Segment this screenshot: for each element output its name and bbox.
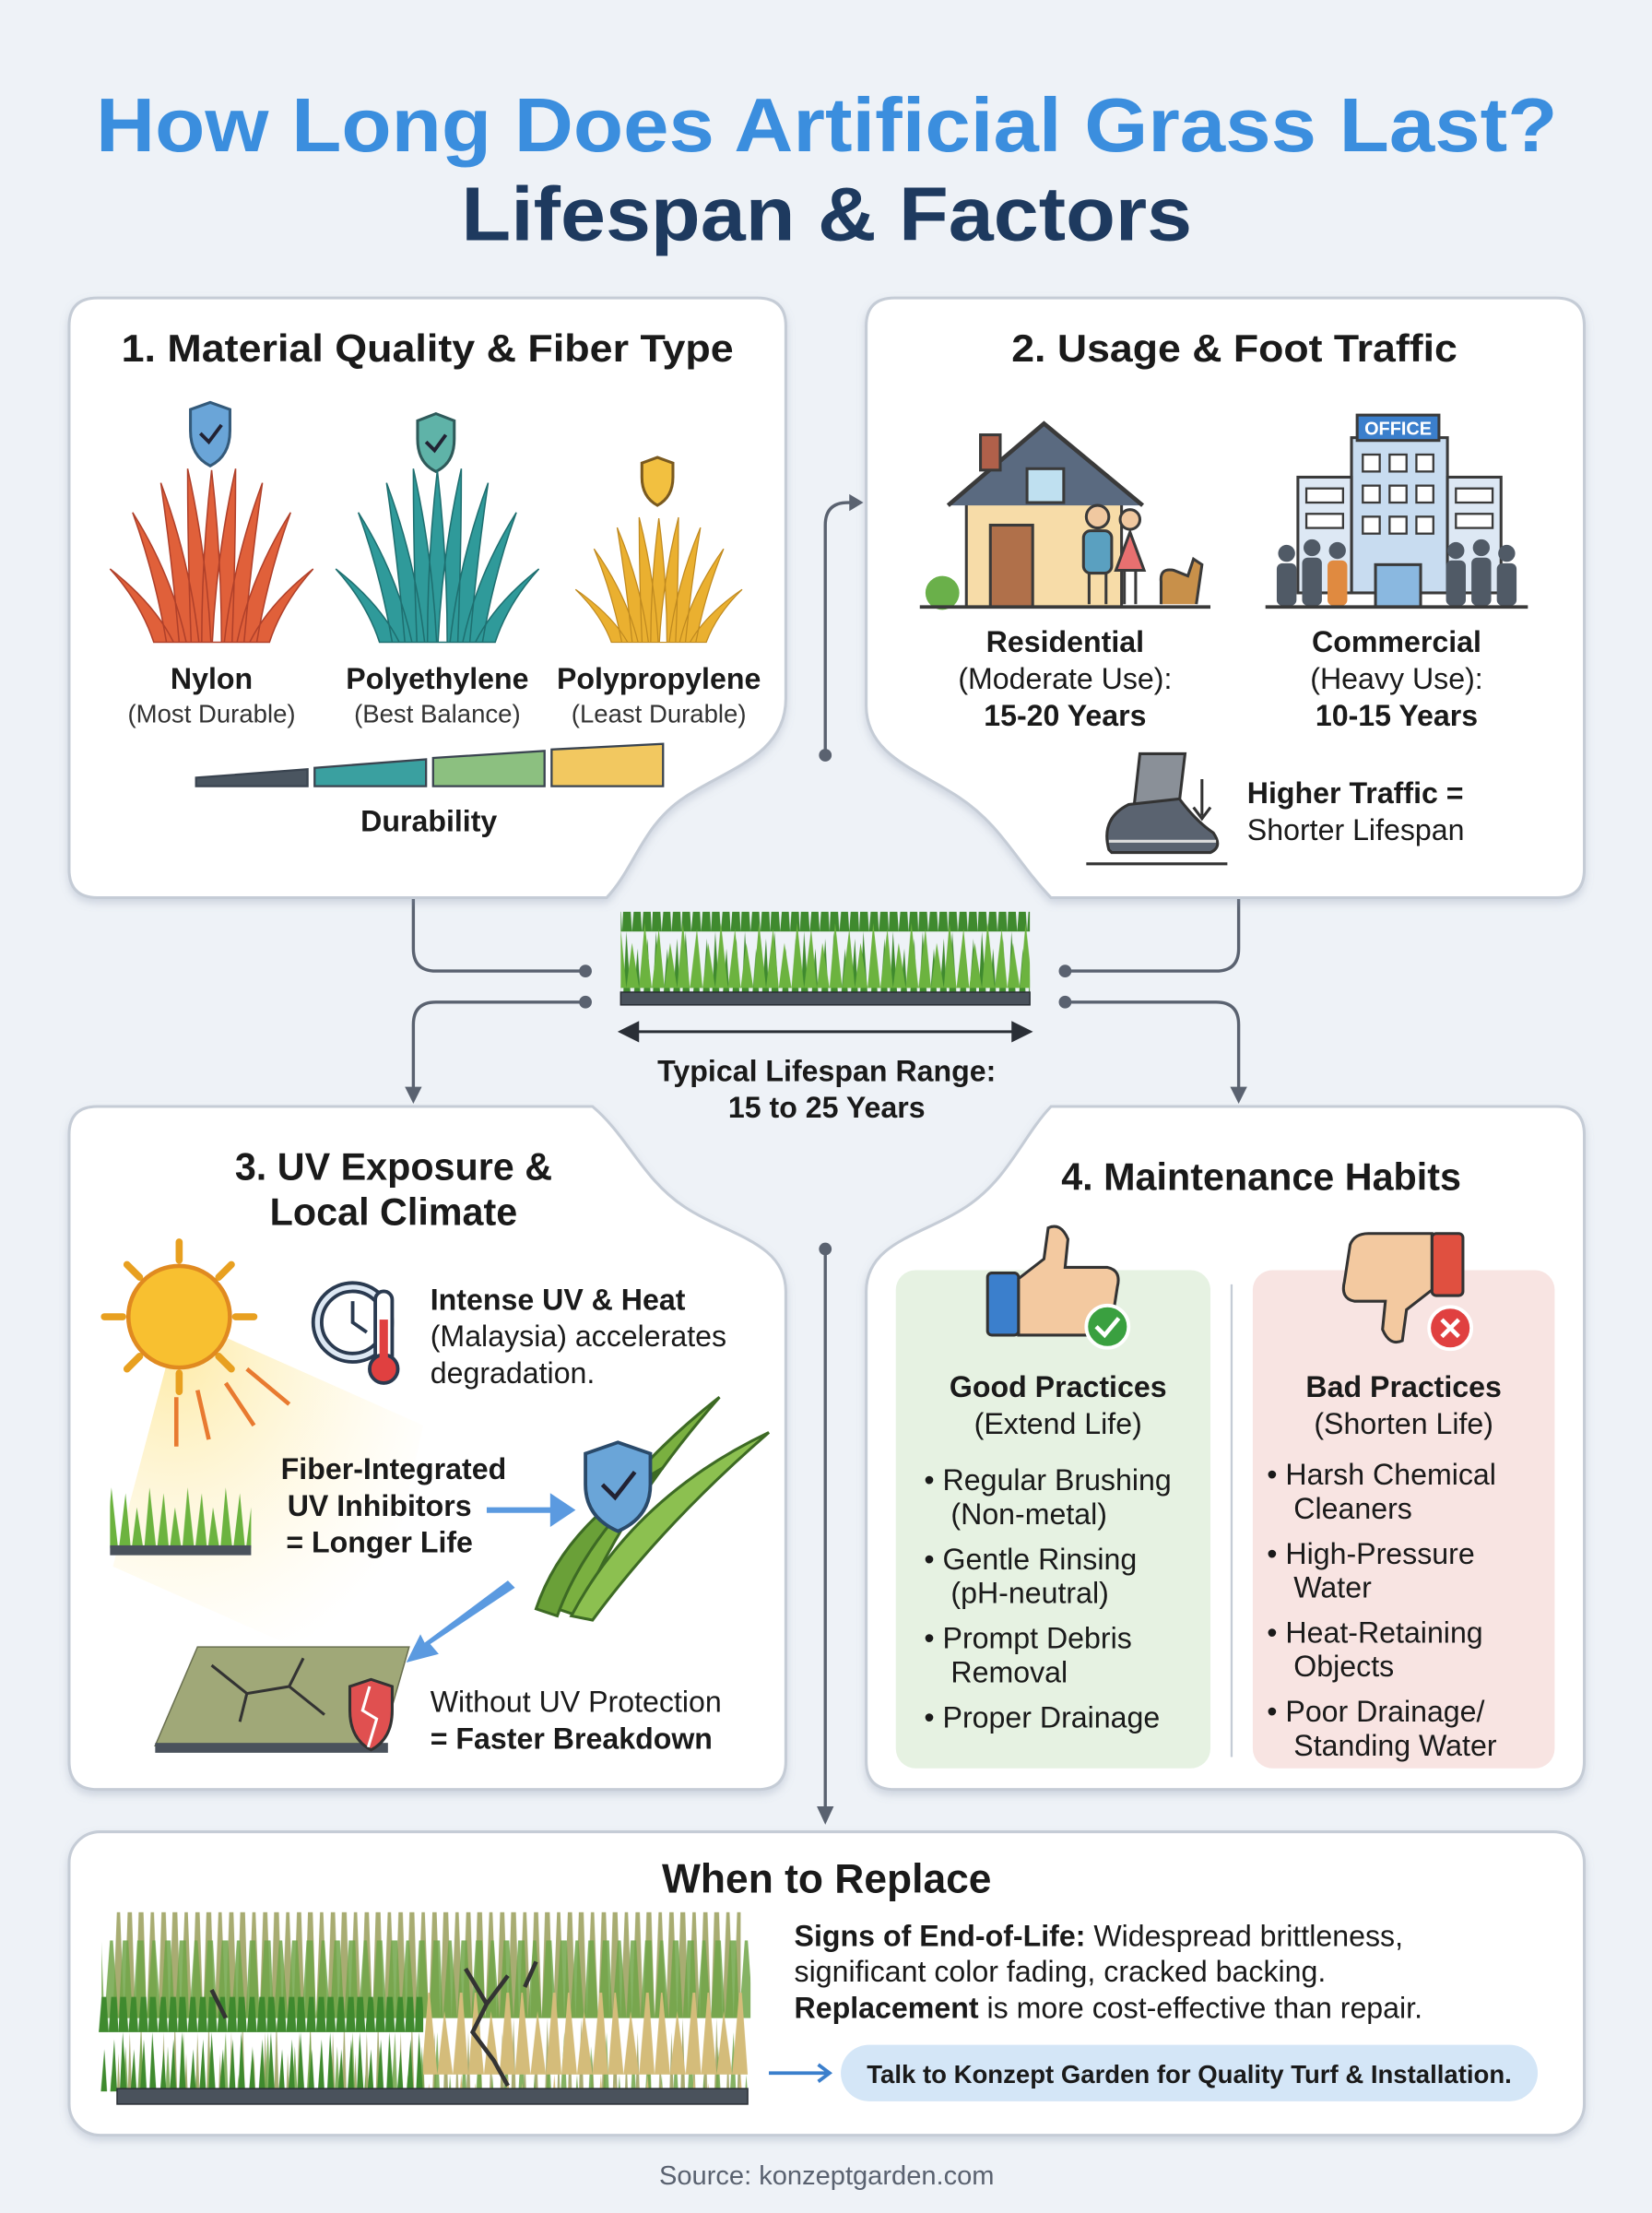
callout: CTA pill: Talk to Konzept Garden for Quality Turf & Installation.: [867, 2060, 1512, 2089]
text: intense UV: (Malaysia) accelerates: [431, 1320, 726, 1353]
text: without UV: [431, 1686, 722, 1755]
heading: [235, 1146, 552, 1234]
labels: Polypropylene: [557, 662, 761, 695]
icon: office with crowd: OFFICE: [1364, 420, 1432, 440]
heading: 1. Material Quality & Fiber Type: [122, 327, 734, 370]
heading: 2. Usage & Foot Traffic: [1011, 327, 1457, 370]
panel: when to replace: [69, 1832, 1585, 2136]
icon: nylon grass: [110, 402, 313, 643]
bad practices box: • Heat-Retaining: [1267, 1616, 1483, 1650]
text: signs: Signs of End-of-Life: Widespread brittleness,: [795, 1920, 1403, 1953]
icon: polyethylene grass: [336, 414, 539, 643]
text: UV inhibitors: Fiber-Integrated: [281, 1452, 506, 1485]
labels: (Best Balance): [354, 700, 521, 728]
icon: thumbs down: [1343, 1234, 1471, 1349]
labels: 10-15 Years: [1316, 699, 1478, 732]
heading: 3. UV Exposure &: [235, 1146, 552, 1189]
bad practices box: (Shorten Life): [1314, 1407, 1493, 1440]
text: signs: [795, 1920, 1422, 2025]
callout: traffic: [1247, 776, 1465, 846]
icon: polypropylene grass: [575, 457, 742, 643]
labels: Commercial: [1312, 625, 1481, 658]
labels: (Most Durable): [128, 700, 296, 728]
labels: (Least Durable): [572, 700, 747, 728]
bad practices box: • High-Pressure: [1267, 1537, 1475, 1570]
durability bar: [196, 744, 663, 838]
panel 3: UV exposure: [69, 1106, 785, 1790]
text: UV inhibitors: [281, 1452, 506, 1559]
heading: Local Climate: [270, 1191, 517, 1234]
icon: cracked turf: [155, 1647, 409, 1753]
bad practices box: Objects: [1293, 1650, 1394, 1683]
bad practices box: • Harsh Chemical: [1267, 1458, 1496, 1491]
good practices box: • Gentle Rinsing: [924, 1543, 1137, 1576]
good practices box: (Non-metal): [950, 1497, 1107, 1531]
title: Lifespan & Factors: [461, 171, 1192, 256]
text: without UV: = Faster Breakdown: [431, 1722, 713, 1755]
icon: house with family: [920, 423, 1210, 609]
text: intense UV: [431, 1283, 726, 1390]
source: Source: konzeptgarden.com: [659, 2161, 995, 2191]
text: signs: Replacement is more cost-effective than repair.: [795, 1992, 1422, 2025]
bad practices box: • Poor Drainage/: [1267, 1695, 1485, 1728]
labels: [128, 662, 761, 728]
callout: traffic: Shorter Lifespan: [1247, 813, 1465, 846]
bad practices box: Bad Practices: [1305, 1370, 1502, 1403]
icon: clock thermometer: [313, 1283, 398, 1383]
icon: small grass: [110, 1485, 251, 1556]
panel 4: maintenance: [867, 1106, 1585, 1790]
text: intense UV: Intense UV & Heat: [431, 1283, 686, 1316]
good practices box: (Extend Life): [974, 1407, 1142, 1440]
icon: worn grass: [99, 1912, 750, 2104]
text: intense UV: degradation.: [431, 1356, 595, 1390]
arrow: to blade: [487, 1493, 575, 1527]
icon: shoe: [1086, 753, 1227, 864]
good practices box: (pH-neutral): [950, 1577, 1109, 1610]
arrow: [769, 2065, 830, 2081]
labels: Residential: [986, 625, 1144, 658]
arrow: lifespan range: [620, 1024, 1030, 1040]
labels: Polyethylene: [346, 662, 528, 695]
bad practices box: Standing Water: [1293, 1729, 1497, 1762]
heading: When to Replace: [662, 1856, 991, 1901]
icon: grass blade with shield: [537, 1397, 769, 1620]
good practices box: • Proper Drainage: [924, 1700, 1160, 1734]
arrow: to cracked turf: [407, 1580, 515, 1663]
center grass: [620, 912, 1030, 1124]
text: lifespan range: 15 to 25 Years: [728, 1091, 926, 1124]
text: without UV: Without UV Protection: [431, 1686, 722, 1719]
icon: thumbs up: [987, 1226, 1128, 1348]
labels: 15-20 Years: [984, 699, 1147, 732]
callout: traffic: Higher Traffic =: [1247, 776, 1464, 810]
text: UV inhibitors: UV Inhibitors: [288, 1489, 472, 1522]
bad practices box: Water: [1293, 1571, 1372, 1604]
panel 2: usage: [867, 298, 1585, 898]
connectors: [405, 494, 1247, 1825]
callout: CTA pill: [841, 2045, 1538, 2101]
labels: (Moderate Use):: [958, 662, 1172, 695]
panel 1: material quality: [69, 298, 785, 898]
text: lifespan range: [657, 1054, 996, 1124]
good practices box: [896, 1226, 1210, 1769]
labels: [958, 625, 1483, 732]
bad practices box: Cleaners: [1293, 1492, 1412, 1525]
good practices box: Removal: [950, 1655, 1068, 1688]
good practices box: • Prompt Debris: [924, 1622, 1132, 1655]
light cone: [112, 1317, 423, 1679]
good practices box: • Regular Brushing: [924, 1463, 1172, 1497]
labels: Nylon: [171, 662, 253, 695]
labels: (Heavy Use):: [1310, 662, 1483, 695]
text: signs: significant color fading, cracked backing.: [795, 1955, 1326, 1988]
durability bar: Durability: [360, 805, 497, 838]
good practices box: Good Practices: [950, 1370, 1167, 1403]
title: How Long Does Artificial Grass Last?: [96, 82, 1557, 168]
text: UV inhibitors: = Longer Life: [286, 1526, 473, 1559]
title: [96, 82, 1557, 256]
heading: 4. Maintenance Habits: [1061, 1155, 1461, 1198]
icon: office with crowd: [1266, 415, 1528, 607]
icon: sun: [104, 1242, 289, 1447]
text: lifespan range: Typical Lifespan Range:: [657, 1054, 996, 1087]
bad practices box: [1253, 1234, 1554, 1769]
